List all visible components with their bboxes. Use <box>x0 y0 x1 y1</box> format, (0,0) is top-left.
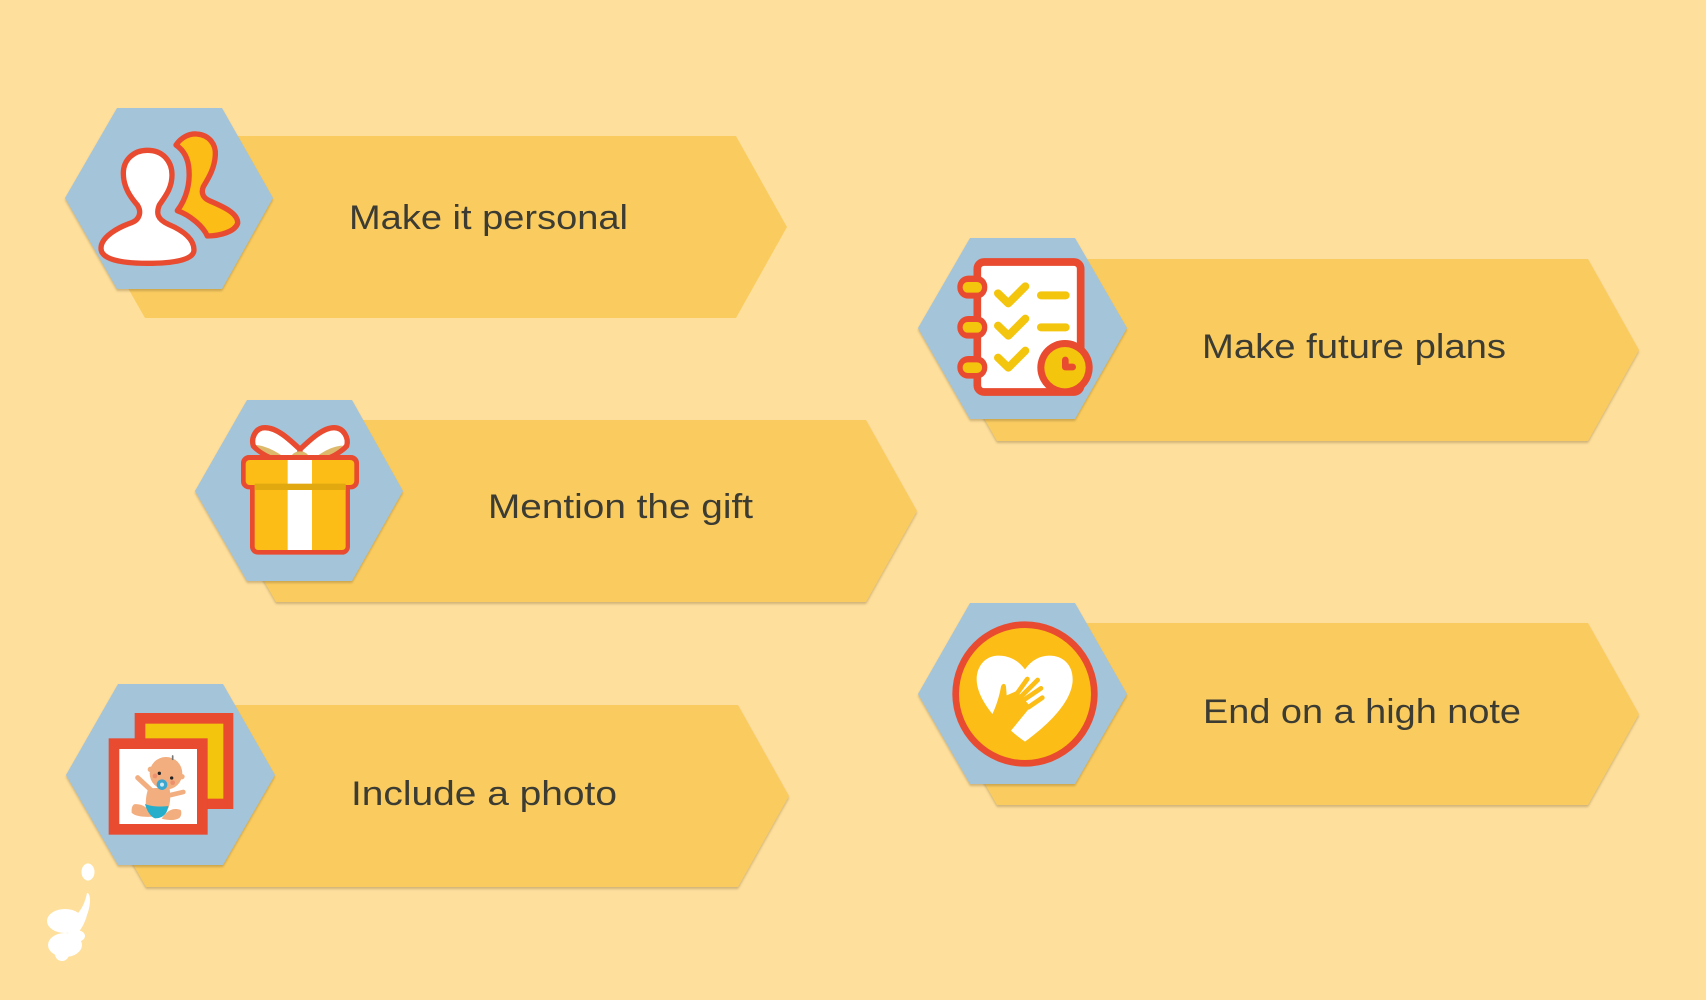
label: Mention the gift <box>488 488 754 526</box>
hexagon <box>918 238 1127 419</box>
item: make future plans <box>918 238 1639 441</box>
banner <box>224 420 917 602</box>
banner <box>945 259 1639 441</box>
logo: elephant with balloon <box>47 864 94 961</box>
icon: gift box <box>241 428 359 555</box>
item: include a photo <box>66 684 789 887</box>
banner <box>945 623 1639 805</box>
item: mention the gift <box>195 400 917 602</box>
icon: baby photos <box>109 713 233 835</box>
item: make it personal <box>65 108 787 318</box>
icon: two people <box>101 134 238 263</box>
icon: hand on heart <box>952 621 1098 767</box>
label: Include a photo <box>351 775 617 813</box>
hexagon <box>65 108 273 289</box>
hexagon <box>918 603 1127 784</box>
item: end on a high note <box>918 603 1639 805</box>
label: Make it personal <box>349 199 628 237</box>
label: End on a high note <box>1203 693 1521 731</box>
hexagon <box>195 400 403 581</box>
label: Make future plans <box>1202 328 1506 366</box>
banner <box>93 136 787 318</box>
hexagon <box>66 684 275 865</box>
banner <box>94 705 789 887</box>
icon: checklist notebook <box>957 262 1093 395</box>
